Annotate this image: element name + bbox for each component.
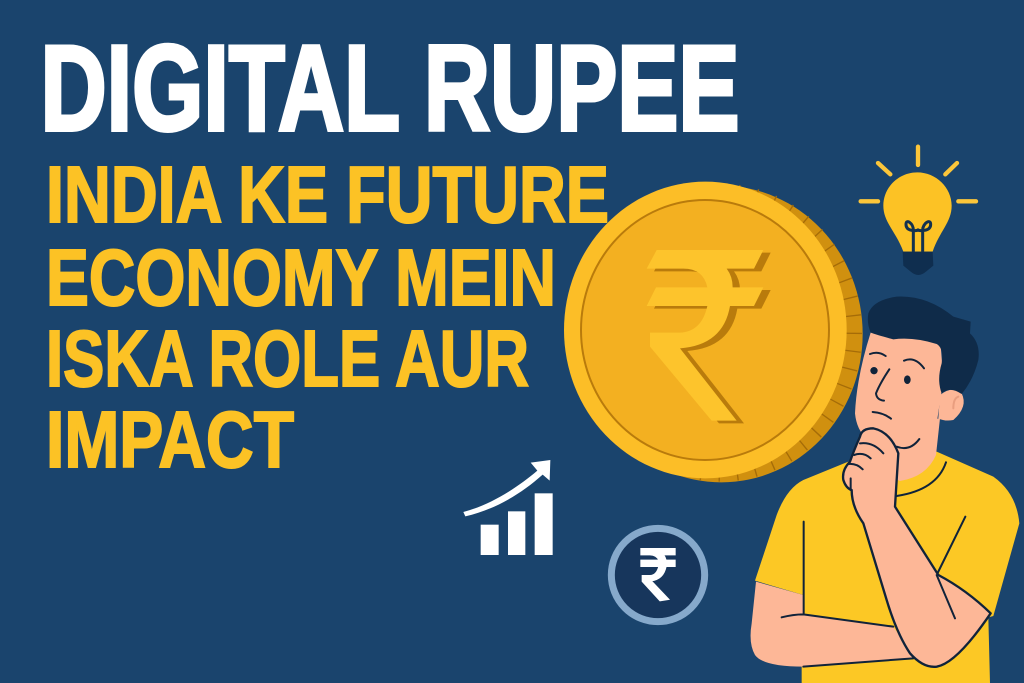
face — [855, 323, 943, 451]
neck — [880, 418, 940, 481]
back arm — [751, 582, 915, 667]
subtitle: ISKA ROLE AUR — [46, 314, 529, 403]
t-shirt — [755, 452, 1019, 683]
ear — [938, 390, 964, 421]
forearm and fist — [843, 428, 991, 667]
subtitle — [46, 150, 609, 484]
icon: gold rupee coin — [564, 182, 863, 482]
subtitle: INDIA KE FUTURE — [46, 150, 609, 239]
subtitle: ECONOMY MEIN — [46, 233, 556, 322]
icon: growth chart with arrow — [463, 460, 553, 555]
icon: rupee badge — [611, 528, 705, 622]
subtitle: IMPACT — [46, 395, 294, 484]
title: DIGITAL RUPEE — [40, 20, 740, 156]
icon: light bulb — [861, 147, 976, 275]
hair — [868, 297, 979, 394]
face details — [870, 353, 946, 496]
illustration: thinking man — [751, 297, 1019, 683]
